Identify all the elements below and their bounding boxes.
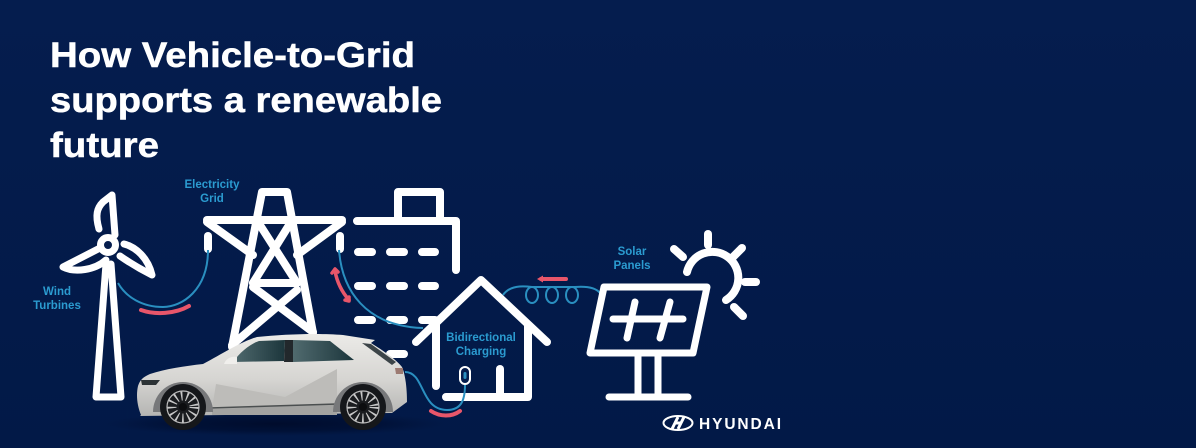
arrow: charging flow (431, 411, 460, 416)
logo: Hyundai (664, 416, 781, 433)
car shadow (105, 412, 445, 436)
label: wind turbines (33, 286, 81, 312)
insulators (208, 236, 340, 249)
wire: turbine to grid (118, 250, 208, 307)
icon: electricity pylon (207, 192, 342, 347)
car rear window (362, 343, 396, 365)
title: supports a renewable (50, 81, 442, 120)
title: How Vehicle-to-Grid (50, 36, 415, 75)
label: wind turbines: Wind (43, 286, 71, 298)
logo: Hyundai: HYUNDAI (699, 416, 781, 433)
arrow: grid flow (332, 269, 349, 301)
title: future (50, 126, 159, 165)
car lower trim (212, 404, 337, 415)
wire: car to charger (405, 372, 465, 410)
label: electricity grid: Grid (200, 193, 224, 205)
label: electricity grid: Electricity (185, 179, 240, 191)
label: bidirectional charging: Charging (456, 346, 506, 358)
front wheel (153, 382, 213, 430)
icon: solar panel (590, 287, 707, 397)
car (137, 334, 407, 430)
arrow: turbine to grid (141, 306, 189, 313)
icon: sun (674, 234, 756, 316)
label: solar panels (613, 246, 651, 272)
icon: apartment building (357, 192, 456, 354)
rear wheel (333, 382, 393, 430)
label: bidirectional charging: Bidirectional (446, 332, 516, 344)
title (50, 36, 442, 165)
car headlight and tail light (141, 380, 160, 385)
wire: solar coil (503, 286, 600, 303)
icon: wall charger (460, 367, 470, 384)
wire: grid to house (339, 250, 423, 328)
label: electricity grid (185, 179, 240, 205)
label: bidirectional charging (446, 332, 516, 358)
car windows (233, 340, 285, 362)
car body shading (212, 369, 337, 409)
label: wind turbines: Turbines (33, 300, 81, 312)
icon: house (416, 280, 547, 397)
car mirror (224, 357, 237, 364)
icon: wind turbine (63, 195, 152, 397)
label: solar panels: Solar (618, 246, 647, 258)
arrow: solar flow (537, 276, 566, 282)
label: solar panels: Panels (613, 260, 651, 272)
